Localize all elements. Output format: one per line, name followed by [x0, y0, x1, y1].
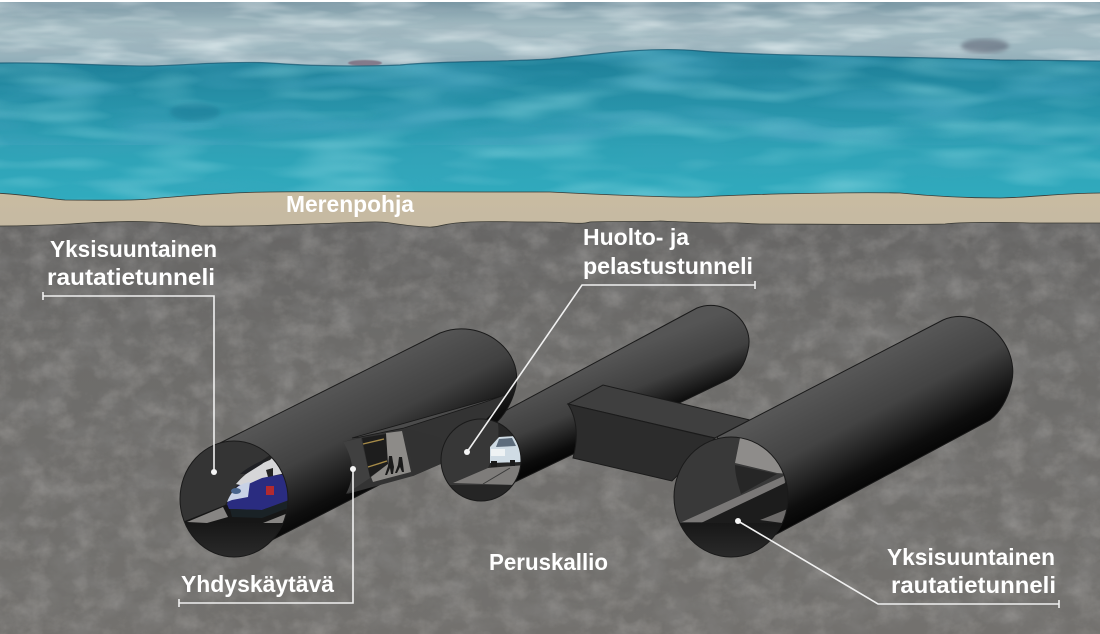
outline: left mouth [180, 441, 288, 557]
panel: water [0, 45, 1100, 205]
icon: car [490, 436, 522, 467]
callout: service and rescue tunnel [464, 224, 755, 455]
tunnel: right rail tunnel body [717, 316, 1013, 535]
icon: train [227, 457, 289, 518]
tunnel: connecting passage left [343, 395, 505, 494]
icon: walking silhouettes [385, 456, 404, 475]
callout: connecting passage [179, 466, 356, 607]
panel: sea surface [0, 2, 1100, 72]
callout: left rail tunnel: rautatietunneli [47, 264, 215, 290]
callout: left rail tunnel: Yksisuuntainen [50, 236, 217, 262]
outline: right mouth [674, 437, 788, 557]
tunnel: service and rescue tunnel [490, 305, 749, 482]
callout: service and rescue tunnel: pelastustunneli [583, 253, 753, 279]
tunnel: connecting cross passage right [568, 385, 750, 481]
opening: right tunnel mouth empty [674, 438, 786, 556]
opening: left tunnel mouth with train [180, 442, 288, 556]
panel: rock background [0, 215, 1100, 634]
panel: seabed sand [0, 192, 1100, 227]
outline: middle mouth [441, 419, 521, 501]
tunnel: left single-direction rail tunnel [220, 329, 517, 540]
callout: right rail tunnel: Yksisuuntainen [887, 544, 1055, 570]
callout: right rail tunnel [735, 518, 1059, 608]
label: seabed: Merenpohja [286, 191, 414, 217]
label: bedrock: Peruskallio [489, 549, 608, 575]
callout: service and rescue tunnel: Huolto- ja [583, 224, 689, 250]
callout: connecting passage: Yhdyskäytävä [181, 571, 334, 597]
callout: left rail tunnel [43, 236, 217, 475]
opening: middle tunnel mouth with car [442, 420, 520, 500]
callout: right rail tunnel: rautatietunneli [891, 572, 1056, 598]
